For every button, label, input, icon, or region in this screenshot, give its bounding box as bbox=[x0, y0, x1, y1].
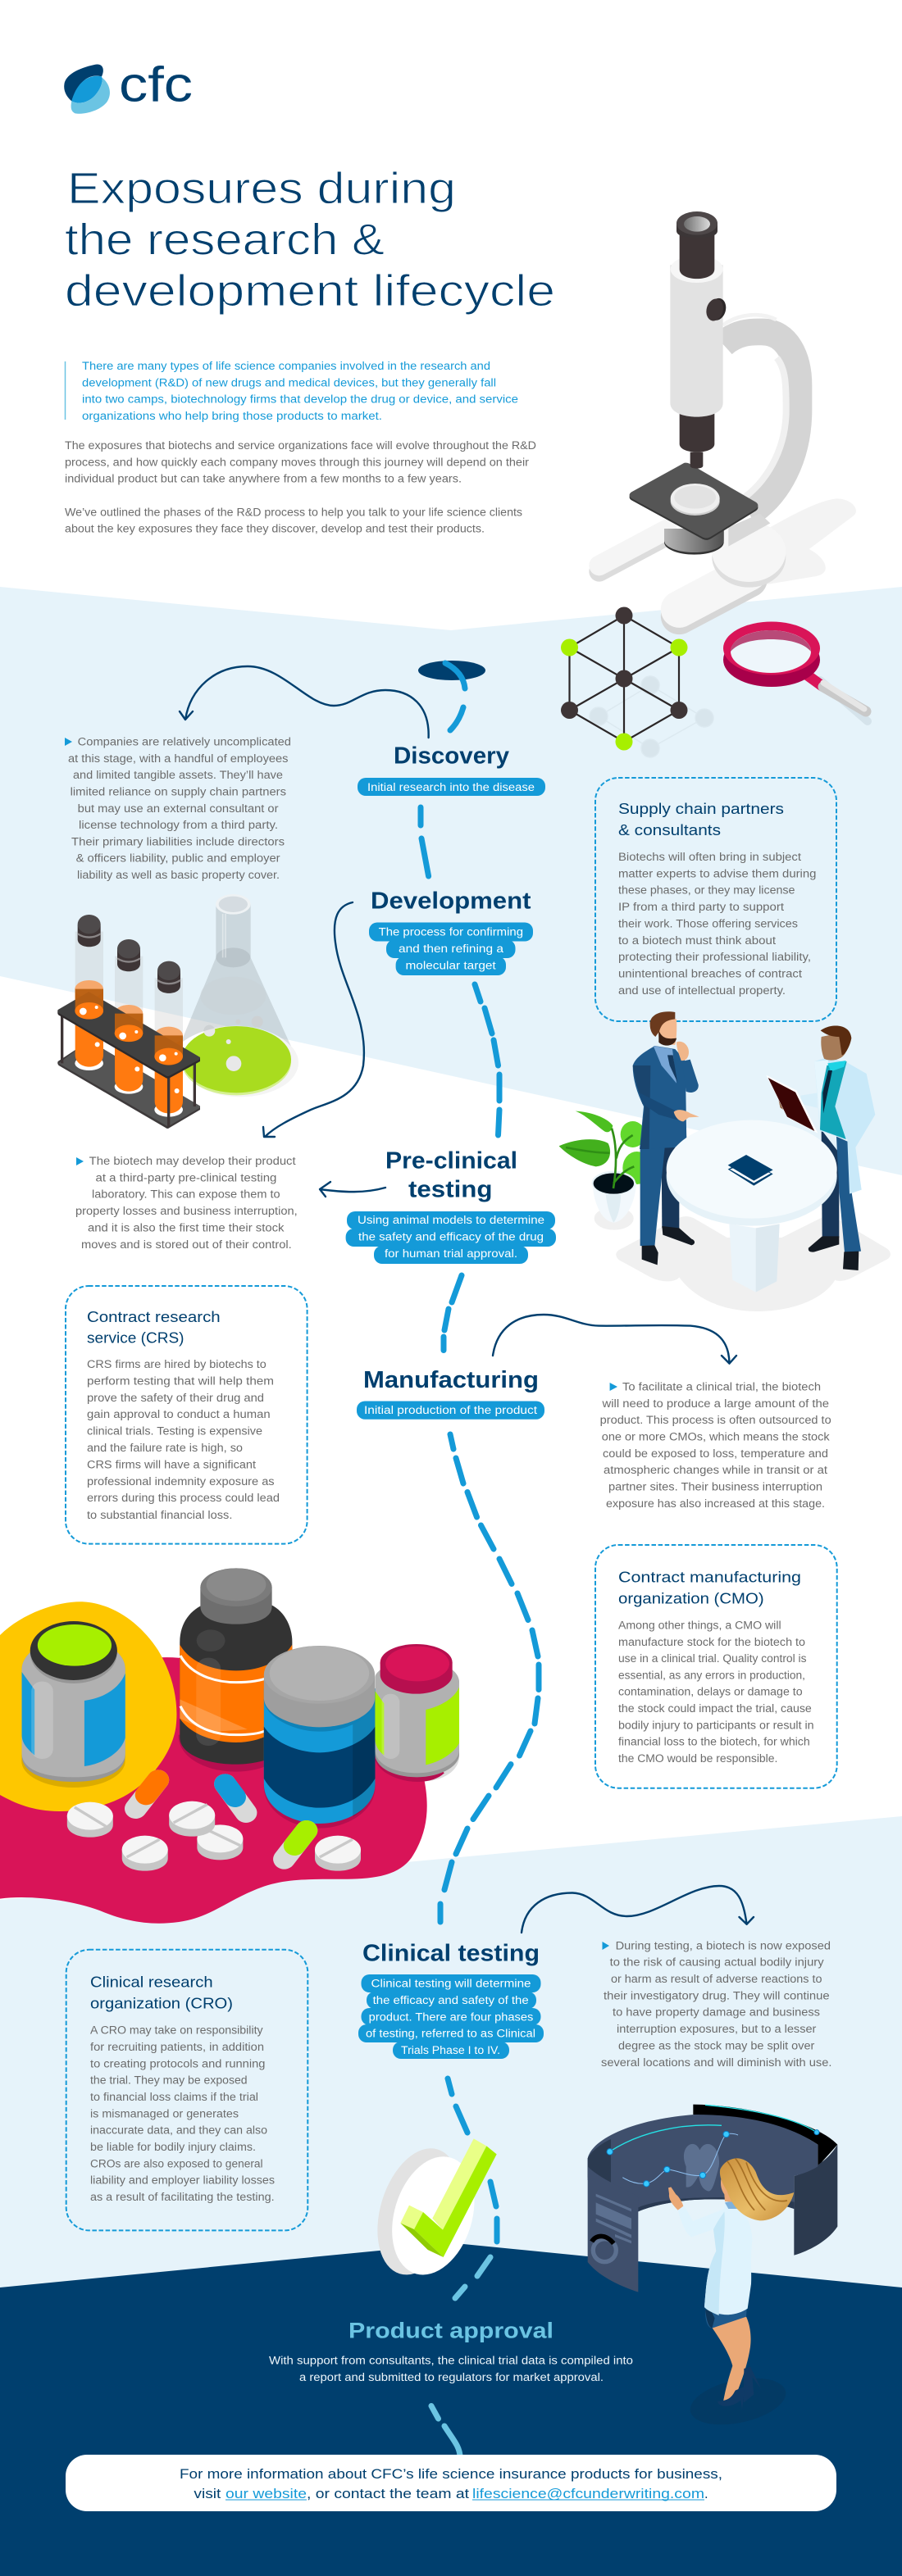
icon: medicine bottles and pills bbox=[0, 1568, 459, 1924]
logo: cfc: cfc bbox=[119, 57, 193, 111]
panel: supply chain partners: protecting their professional liability, bbox=[618, 951, 811, 963]
panel: supply chain partners: their work. Those offering services bbox=[618, 917, 798, 929]
text block: discovery exposures: but may use an external consultant or bbox=[78, 802, 279, 815]
panel: contract manufacturing organization: contamination, delays or damage to bbox=[618, 1686, 803, 1698]
text block: discovery exposures: limited reliance on supply chain partners bbox=[71, 785, 286, 797]
intro text block: blue lead bbox=[66, 360, 518, 422]
panel: contract research service: and the failure rate is high, so bbox=[87, 1442, 243, 1454]
icon: man in suit bbox=[633, 1011, 699, 1265]
panel: supply chain partners: and use of intellectual property. bbox=[618, 984, 786, 997]
intro text block: blue lead: There are many types of life science companies involved in the research and bbox=[82, 360, 490, 372]
text block: pre-clinical exposures: moves and is stored out of their control. bbox=[81, 1238, 292, 1251]
intro text block: body: process, and how quickly each company moves through this journey will depend on their bbox=[65, 456, 530, 468]
intro text block: body bbox=[65, 439, 536, 535]
panel: contract research service: service (CRS) bbox=[87, 1329, 184, 1347]
panel: clinical research organization: the trial. They may be exposed bbox=[90, 2074, 248, 2087]
intro text block: body: We’ve outlined the phases of the R&D process to help you talk to your life science clients bbox=[65, 506, 522, 518]
panel: contract manufacturing organization: the CMO would be responsible. bbox=[618, 1752, 777, 1765]
panel: clinical research organization: liability and employer liability losses bbox=[90, 2174, 275, 2187]
arrow: pre-clinical to text bbox=[320, 1182, 385, 1197]
panel: clinical research organization: is mismanaged or generates bbox=[90, 2107, 239, 2119]
heading: development: and then refining a bbox=[399, 943, 504, 955]
panel: clinical research organization: as a result of facilitating the testing. bbox=[90, 2191, 275, 2203]
text block: product approval bbox=[269, 2355, 633, 2383]
callout: contact information: visit bbox=[194, 2487, 221, 2501]
panel: contract research service: to substantial financial loss. bbox=[87, 1509, 232, 1521]
panel: supply chain partners: these phases, or they may license bbox=[618, 884, 795, 897]
panel: supply chain partners bbox=[595, 778, 836, 1021]
arrow: development to text bbox=[263, 902, 364, 1137]
icon: molecule bbox=[561, 607, 713, 757]
panel: clinical research organization: for recruiting patients, in addition bbox=[90, 2041, 264, 2053]
heading: clinical testing: the efficacy and safety of the bbox=[373, 1994, 529, 2006]
text block: discovery exposures: Their primary liabilities include directors bbox=[71, 835, 285, 847]
panel: supply chain partners: matter experts to advise them during bbox=[618, 867, 816, 879]
icon: navy label jar bbox=[264, 1646, 376, 1829]
intro text block: body: about the key exposures they face they discover, develop and test their products. bbox=[65, 523, 485, 535]
title: the research & bbox=[65, 215, 385, 264]
callout: contact information: our website bbox=[226, 2487, 307, 2501]
icon: round table bbox=[667, 1120, 837, 1293]
text block: product approval: With support from consultants, the clinical trial data is compiled into bbox=[269, 2355, 633, 2367]
heading: pre-clinical testing: for human trial approval. bbox=[385, 1247, 517, 1260]
text block: discovery exposures: Companies are relatively uncomplicated bbox=[78, 736, 291, 747]
panel: contract manufacturing organization: Contract manufacturing bbox=[618, 1569, 801, 1586]
heading: pre-clinical testing bbox=[346, 1147, 556, 1264]
callout: contact information: . bbox=[704, 2487, 708, 2501]
panel: contract manufacturing organization: manufacture stock for the biotech to bbox=[618, 1636, 805, 1648]
text block: clinical testing exposures: their investigatory drug. They will continue bbox=[604, 1989, 830, 2001]
panel: contract research service: gain approval to conduct a human bbox=[87, 1408, 271, 1420]
panel: supply chain partners: Supply chain partners bbox=[618, 800, 784, 817]
intro text block: blue lead: development (R&D) of new drugs and medical devices, but they generally fall bbox=[82, 376, 496, 388]
heading: pre-clinical testing: testing bbox=[408, 1177, 492, 1203]
text block: discovery exposures: license technology from a third party. bbox=[79, 819, 278, 831]
panel: contract research service: professional indemnity exposure as bbox=[87, 1475, 275, 1488]
panel: contract research service: CRS firms are hired by biotechs to bbox=[87, 1358, 266, 1370]
callout: contact information: , or contact the team at bbox=[307, 2487, 469, 2501]
arrow: manufacturing to text bbox=[493, 1315, 736, 1364]
text block: clinical testing exposures: During testing, a biotech is now exposed bbox=[616, 1939, 831, 1951]
panel: contract manufacturing organization bbox=[595, 1545, 837, 1788]
callout: contact information: For more information about CFC’s life science insurance products for business, bbox=[180, 2467, 722, 2482]
panel: clinical research organization: organization (CRO) bbox=[90, 1994, 233, 2011]
text block: pre-clinical exposures: and it is also the first time their stock bbox=[88, 1221, 285, 1233]
text block: pre-clinical exposures: The biotech may develop their product bbox=[89, 1155, 296, 1167]
heading: manufacturing: Manufacturing bbox=[363, 1367, 539, 1393]
text block: pre-clinical exposures: laboratory. This can expose them to bbox=[92, 1188, 280, 1201]
text block: clinical testing exposures: to have property damage and business bbox=[613, 2006, 820, 2019]
heading: manufacturing: Initial production of the product bbox=[364, 1404, 537, 1416]
title bbox=[65, 164, 555, 316]
background: navy footer band bbox=[0, 2243, 902, 2576]
heading: discovery bbox=[358, 743, 545, 796]
panel: clinical research organization: A CRO may take on responsibility bbox=[90, 2024, 263, 2037]
heading: clinical testing bbox=[358, 1941, 544, 2059]
text block: manufacturing exposures: will need to produce a large amount of the bbox=[601, 1397, 829, 1410]
icon: doctor in lab coat bbox=[766, 1025, 875, 1270]
panel: contract research service: Contract research bbox=[87, 1308, 221, 1325]
heading: manufacturing bbox=[357, 1367, 544, 1420]
heading: clinical testing: Clinical testing bbox=[362, 1941, 540, 1967]
text block: clinical testing exposures: interruption exposures, but to a lesser bbox=[617, 2023, 817, 2035]
panel: contract manufacturing organization: use in a clinical trial. Quality control is bbox=[618, 1652, 807, 1665]
icon: blue label jar bbox=[21, 1621, 125, 1788]
heading: pre-clinical testing: the safety and efficacy of the drug bbox=[358, 1231, 544, 1243]
text block: manufacturing exposures bbox=[600, 1380, 831, 1510]
panel: contract manufacturing organization: essential, as any errors in production, bbox=[618, 1669, 805, 1681]
arrow: discovery to text bbox=[180, 666, 429, 738]
logo: cfc bbox=[64, 57, 193, 114]
panel: contract manufacturing organization: organization (CMO) bbox=[618, 1590, 764, 1607]
text block: manufacturing exposures: one or more CMOs, which means the stock bbox=[602, 1431, 830, 1442]
icon: scientist with holographic screen bbox=[588, 2105, 837, 2433]
panel: contract manufacturing organization: financial loss to the biotech, for which bbox=[618, 1736, 810, 1748]
panel: clinical research organization: CROs are also exposed to general bbox=[90, 2157, 263, 2169]
icon: test tubes and flask bbox=[57, 894, 298, 1129]
background: light blue lower band bbox=[0, 1816, 902, 2295]
text block: pre-clinical exposures: at a third-party pre-clinical testing bbox=[95, 1171, 276, 1184]
heading: development: The process for confirming bbox=[379, 926, 523, 938]
panel: clinical research organization: inaccurate data, and they can also bbox=[90, 2124, 267, 2137]
heading: pre-clinical testing: Using animal models to determine bbox=[358, 1214, 544, 1226]
heading: clinical testing: product. There are four phases bbox=[369, 2010, 534, 2023]
text block: product approval: a report and submitted to regulators for market approval. bbox=[299, 2371, 604, 2383]
text block: manufacturing exposures: exposure has also increased at this stage. bbox=[606, 1497, 825, 1510]
panel: supply chain partners: & consultants bbox=[618, 821, 721, 838]
panel: clinical research organization: to creating protocols and running bbox=[90, 2057, 265, 2069]
path: blue dashed journey line bbox=[418, 661, 539, 2457]
text block: clinical testing exposures: degree as the stock may be split over bbox=[618, 2039, 815, 2051]
icon: yellow blob bbox=[0, 1601, 176, 1811]
text block: discovery exposures: & officers liability, public and employer bbox=[76, 852, 280, 865]
intro text block: body: individual product but can take anywhere from a few months to a few years. bbox=[65, 473, 462, 485]
panel: clinical research organization: Clinical research bbox=[90, 1974, 213, 1991]
text block: discovery exposures: at this stage, with a handful of employees bbox=[68, 752, 289, 765]
text block: clinical testing exposures bbox=[601, 1939, 831, 2069]
panel: supply chain partners: IP from a third party to support bbox=[618, 901, 784, 913]
text block: discovery exposures bbox=[65, 736, 291, 881]
heading: development: Development bbox=[371, 888, 531, 915]
panel: contract research service: clinical trials. Testing is expensive bbox=[87, 1425, 262, 1438]
text block: discovery exposures: liability as well as basic property cover. bbox=[77, 869, 280, 881]
arrow: clinical testing to text bbox=[522, 1886, 754, 1933]
panel: supply chain partners: Biotechs will often bring in subject bbox=[618, 851, 801, 863]
icon: plant bbox=[559, 1111, 651, 1230]
text block: manufacturing exposures: To facilitate a clinical trial, the biotech bbox=[622, 1380, 821, 1392]
icon: magenta blob bbox=[0, 1657, 427, 1924]
icon: check mark disc bbox=[363, 2138, 497, 2285]
panel: supply chain partners: to a biotech must think about bbox=[618, 934, 776, 947]
intro text block: blue lead: organizations who help bring those products to market. bbox=[82, 410, 382, 422]
panel: contract research service bbox=[66, 1286, 308, 1544]
heading: clinical testing: of testing, referred to as Clinical bbox=[366, 2028, 535, 2040]
heading: discovery: Discovery bbox=[394, 743, 509, 769]
panel: supply chain partners: unintentional breaches of contract bbox=[618, 967, 802, 979]
text block: pre-clinical exposures: property losses and business interruption, bbox=[75, 1205, 298, 1217]
intro text block: body: The exposures that biotechs and service organizations face will evolve throughout the R&D bbox=[65, 439, 536, 452]
text block: manufacturing exposures: could be exposed to loss, temperature and bbox=[603, 1447, 828, 1460]
panel: contract research service: prove the safety of their drug and bbox=[87, 1392, 264, 1404]
icon: magnifying glass bbox=[723, 621, 868, 721]
heading: clinical testing: Trials Phase I to IV. bbox=[401, 2044, 500, 2056]
text block: clinical testing exposures: or harm as result of adverse reactions to bbox=[611, 1973, 822, 1985]
panel: contract manufacturing organization: the stock could impact the trial, cause bbox=[618, 1702, 812, 1715]
icon: floor shadow bbox=[616, 1216, 891, 1311]
icon: microscope bbox=[599, 211, 856, 616]
panel: clinical research organization: be liable for bodily injury claims. bbox=[90, 2141, 256, 2153]
panel: contract research service: CRS firms will have a significant bbox=[87, 1458, 256, 1470]
heading: development: molecular target bbox=[405, 959, 496, 972]
title: Exposures during bbox=[67, 164, 456, 213]
panel: contract research service: perform testing that will help them bbox=[87, 1374, 274, 1387]
heading: clinical testing: Clinical testing will determine bbox=[371, 1977, 531, 1990]
title: development lifecycle bbox=[65, 266, 555, 316]
heading: discovery: Initial research into the disease bbox=[367, 781, 535, 793]
heading: pre-clinical testing: Pre-clinical bbox=[385, 1147, 517, 1174]
callout: contact information bbox=[66, 2455, 836, 2511]
callout: contact information: lifescience@cfcunderwriting.com bbox=[472, 2487, 704, 2501]
panel: contract manufacturing organization: Among other things, a CMO will bbox=[618, 1620, 781, 1631]
text block: pre-clinical exposures bbox=[75, 1155, 298, 1251]
text block: discovery exposures: and limited tangible assets. They’ll have bbox=[73, 769, 283, 781]
intro text block: blue lead: into two camps, biotechnology firms that develop the drug or device, and service bbox=[82, 393, 518, 406]
panel: contract research service: errors during this process could lead bbox=[87, 1492, 280, 1504]
text block: clinical testing exposures: several locations and will diminish with use. bbox=[601, 2056, 831, 2069]
text block: clinical testing exposures: to the risk of causing actual bodily injury bbox=[610, 1956, 824, 1969]
panel: clinical research organization bbox=[66, 1950, 308, 2230]
text block: manufacturing exposures: product. This process is often outsourced to bbox=[600, 1414, 831, 1426]
icon: orange label bottle bbox=[178, 1568, 292, 1772]
heading: development bbox=[369, 888, 533, 975]
icon: tablets and capsules bbox=[67, 1780, 361, 1871]
heading: product approval: Product approval bbox=[348, 2319, 554, 2343]
text block: manufacturing exposures: partner sites. Their business interruption bbox=[608, 1480, 822, 1493]
text block: manufacturing exposures: atmospheric changes while in transit or at bbox=[604, 1464, 827, 1476]
icon: scientists around table with plant bbox=[559, 1011, 891, 1311]
background: light blue upper band bbox=[0, 587, 902, 1175]
panel: contract manufacturing organization: bodily injury to participants or result in bbox=[618, 1719, 814, 1731]
icon: lime label jar bbox=[375, 1644, 459, 1782]
panel: clinical research organization: to financial loss claims if the trial bbox=[90, 2091, 258, 2103]
